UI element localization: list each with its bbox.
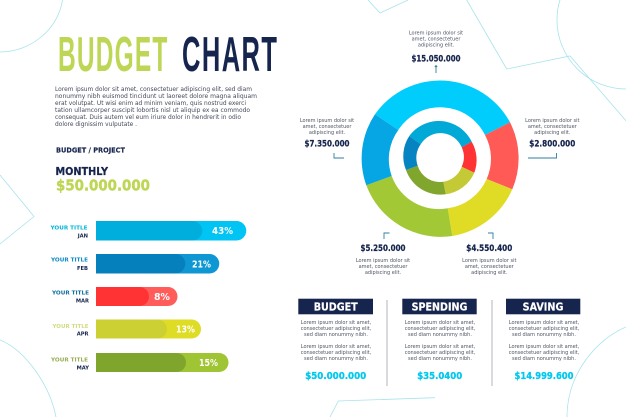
intro paragraph: Lorem ipsum dolor sit amet, consectetuer adipiscing elit, sed diam [55, 87, 252, 93]
callout: top [409, 31, 463, 73]
callout: right: adipiscing elit. [534, 130, 571, 136]
title: BUDGET [58, 28, 169, 82]
bar: apr: YOUR TITLE [51, 324, 89, 330]
donut chart [362, 81, 519, 237]
callout: bottom right: Lorem ipsum dolor sit [462, 258, 516, 264]
bar: apr [51, 320, 201, 338]
callout: top: $15.050.000 [412, 54, 460, 64]
title: CHART [182, 28, 278, 82]
panel: saving: Lorem ipsum dolor sit amet, [509, 320, 580, 326]
callout: bottom left [356, 233, 410, 276]
bar chart [49, 221, 246, 372]
callout: bottom left: amet, consectetuer [359, 264, 408, 270]
panel: spending: SPENDING [412, 301, 467, 313]
bar: feb [50, 254, 219, 274]
panel: saving: sed diam nonummy nibh. [512, 332, 576, 338]
bar: mar: YOUR TITLE [51, 290, 89, 296]
bar: may [50, 353, 229, 372]
callout: bottom right: $4.550.400 [466, 244, 512, 254]
panel: budget: BUDGET [314, 301, 358, 313]
bar: may: YOUR TITLE [50, 358, 88, 364]
callout: left: amet, consectetuer [303, 124, 352, 130]
panel: spending: consectetuer adipiscing elit, [405, 326, 476, 332]
bar: feb: YOUR TITLE [50, 258, 88, 264]
bar: may: 15% [199, 358, 218, 369]
bar: feb: 21% [192, 260, 211, 270]
bar: jan: JAN [77, 234, 88, 240]
bar: jan: 43% [212, 226, 233, 237]
callout: bottom left: $5.250.000 [360, 244, 406, 254]
budget / project label: BUDGET / PROJECT [56, 146, 125, 154]
callout: bottom left: Lorem ipsum dolor sit [356, 258, 410, 264]
bar: mar: MAR [76, 298, 89, 304]
panel: spending: consectetuer adipiscing elit, [405, 350, 476, 356]
panel: budget: $50.000.000 [305, 371, 366, 382]
intro paragraph: tation ullamcorper suscipit lobortis nisl ut aliquip ex ea commodo [55, 108, 251, 114]
callout: bottom right [462, 233, 516, 276]
panel: saving: sed diam nonummy nibh. [512, 356, 576, 362]
callout: left: Lorem ipsum dolor sit [300, 118, 354, 124]
callout: left [300, 118, 354, 158]
callout: bottom right: adipiscing elit. [471, 270, 508, 276]
callout: top: Lorem ipsum dolor sit [409, 31, 463, 37]
title [58, 28, 278, 82]
panel: budget: consectetuer adipiscing elit, [301, 326, 372, 332]
intro paragraph: erat volutpat. Ut wisi enim ad minim veniam, quis nostrud exerci [55, 101, 246, 107]
callout: right: Lorem ipsum dolor sit [525, 118, 579, 124]
panel: spending: Lorem ipsum dolor sit amet, [405, 320, 476, 326]
callout: right: amet, consectetuer [528, 124, 578, 130]
panel: budget: Lorem ipsum dolor sit amet, [301, 344, 372, 350]
panel: spending: sed diam nonummy nibh. [408, 356, 472, 362]
bar: jan [49, 221, 246, 240]
bar: mar [51, 287, 177, 306]
callout: left: $7.350.000 [304, 140, 350, 150]
callout: top: amet, consectetuer [412, 37, 461, 43]
bar: apr: APR [77, 332, 89, 338]
panel: budget: sed diam nonummy nibh. [304, 332, 368, 338]
callout: left: adipiscing elit. [309, 130, 346, 136]
inner ring [403, 121, 477, 195]
intro paragraph: consequat. Duis autem vel eum iriure dolor in hendrerit in odio [55, 115, 242, 121]
bar: apr: 13% [176, 324, 195, 336]
panel: spending: sed diam nonummy nibh. [408, 332, 472, 338]
bar: may: MAY [77, 366, 89, 372]
callout: right: $2.800.000 [529, 140, 575, 150]
panel: budget [298, 299, 373, 382]
bar: jan: YOUR TITLE [49, 226, 88, 232]
callout: bottom right: amet, consectetuer [465, 264, 515, 270]
callout: bottom left: adipiscing elit. [365, 270, 402, 276]
panel: spending: $35.0400 [417, 371, 462, 382]
panel: budget: sed diam nonummy nibh. [304, 356, 368, 362]
intro paragraph: nonummy nibh euismod tincidunt ut laoreet dolore magna aliquam [55, 94, 257, 100]
panel: saving: consectetuer adipiscing elit, [509, 350, 580, 356]
panel: saving: $14.999.600 [514, 371, 574, 382]
bar: feb: FEB [77, 266, 88, 272]
monthly amount: $50.000.000 [56, 176, 150, 194]
callout: right [525, 118, 579, 158]
monthly label: MONTHLY [56, 165, 109, 178]
panel: saving [506, 299, 580, 382]
panel: saving: Lorem ipsum dolor sit amet, [509, 344, 580, 350]
intro paragraph [55, 87, 257, 128]
panel: budget: Lorem ipsum dolor sit amet, [301, 320, 372, 326]
panel: budget: consectetuer adipiscing elit, [301, 350, 372, 356]
bar: mar: 8% [154, 292, 170, 303]
intro paragraph: dolore dignissim vulputate . [55, 122, 137, 128]
outer ring [362, 81, 519, 237]
panel: spending [402, 299, 477, 382]
panel: spending: Lorem ipsum dolor sit amet, [405, 344, 476, 350]
panel: saving: SAVING [523, 301, 563, 313]
callout: top: adipiscing elit. [418, 43, 455, 49]
panel: saving: consectetuer adipiscing elit, [509, 326, 580, 332]
